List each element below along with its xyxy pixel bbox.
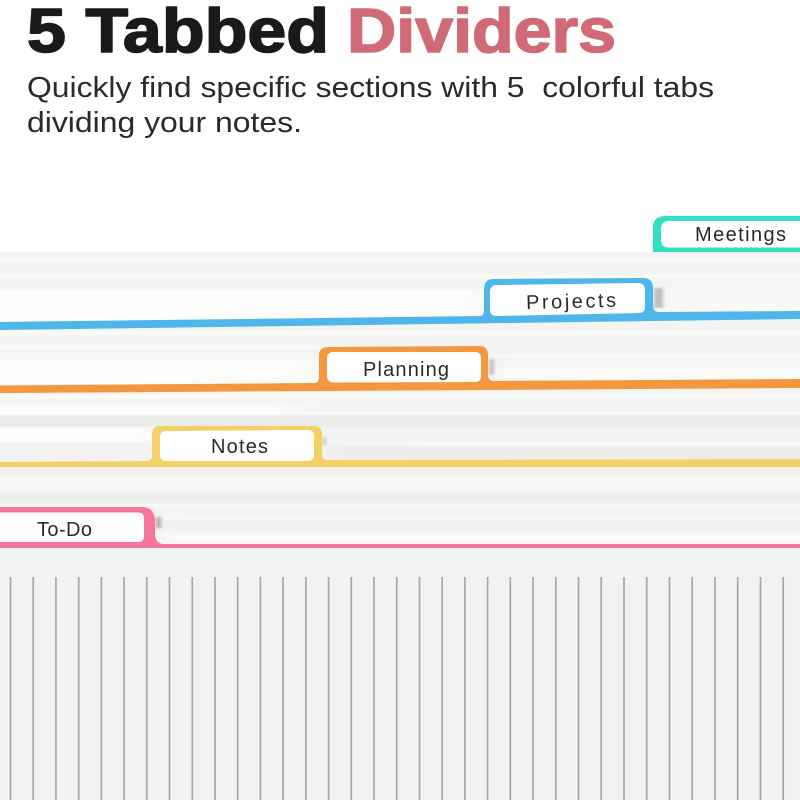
title [27, 0, 616, 66]
subtitle text: dividing your notes. [27, 107, 302, 139]
ruled vertical lines [10, 577, 783, 800]
divider: Planning [0, 346, 800, 393]
stacked page edges [0, 252, 800, 548]
lined notebook page [0, 548, 800, 800]
divider: To-Do [0, 507, 800, 548]
divider: Meetings [653, 216, 800, 252]
subtitle text [27, 72, 714, 139]
divider: Notes [0, 426, 800, 467]
divider: Notes: Notes [211, 436, 268, 458]
divider: Projects: Projects [526, 290, 616, 314]
divider: To-Do: To-Do [37, 519, 92, 541]
tab shadows [156, 288, 663, 528]
subtitle text: Quickly find specific sections with 5 colorful tabs [27, 72, 714, 104]
divider: Planning: Planning [363, 359, 449, 381]
divider: Projects [0, 278, 800, 330]
divider: Meetings: Meetings [695, 224, 786, 246]
